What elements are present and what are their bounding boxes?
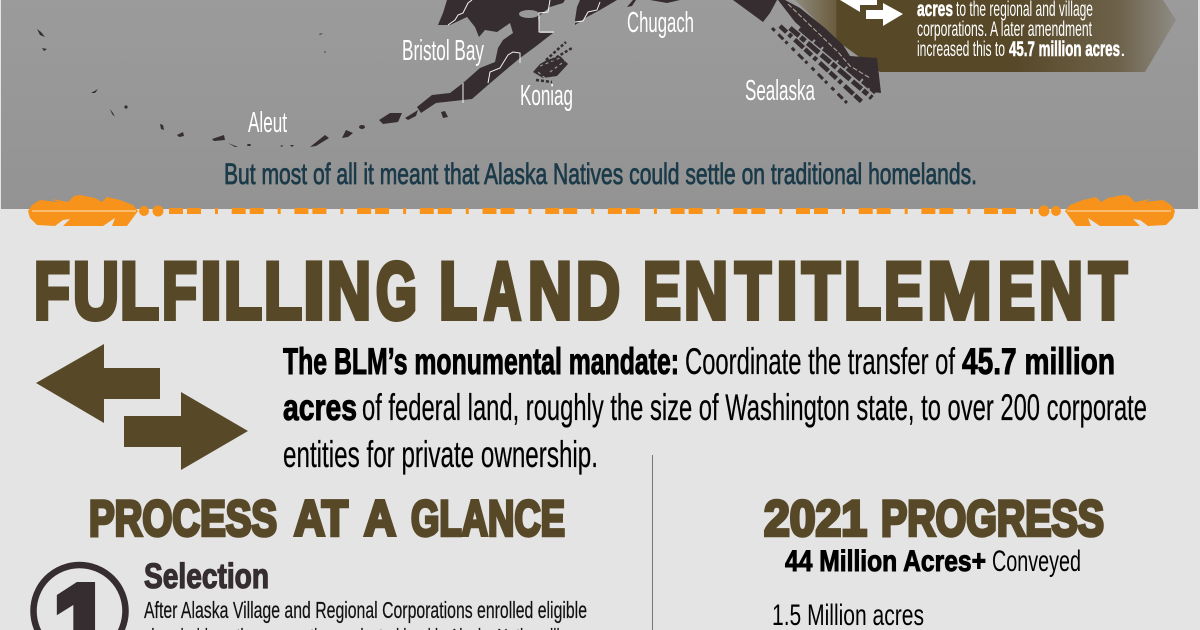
heading: 2021 progress: 2021 xyxy=(764,490,867,546)
title: L xyxy=(120,246,159,336)
icon: white transfer arrows xyxy=(840,0,903,26)
map: regional corporation boundaries xyxy=(448,0,600,103)
text block: BLM mandate: 45.7 million xyxy=(962,341,1115,382)
title: I xyxy=(200,246,222,336)
title: A xyxy=(484,246,521,336)
title: U xyxy=(73,246,119,336)
title: N xyxy=(327,246,371,336)
panel: Alaska map xyxy=(1,0,1198,209)
text block: BLM mandate: Coordinate the transfer of xyxy=(685,341,955,382)
icon: left feather xyxy=(28,195,138,226)
title: E xyxy=(884,246,923,336)
title: L xyxy=(224,246,262,336)
label: Aleut: Aleut xyxy=(248,107,287,139)
progress summary: 44 Million Acres+ xyxy=(785,545,986,578)
heading: 2021 progress xyxy=(764,490,1104,546)
title: L xyxy=(439,246,477,336)
title: L xyxy=(844,246,881,336)
title: M xyxy=(927,246,992,336)
heading: process at a glance xyxy=(89,490,565,546)
callout text: 45.7 million acres xyxy=(1009,38,1120,61)
label: Bristol Bay: Bristol Bay xyxy=(402,35,484,67)
title: I xyxy=(303,246,325,336)
title: D xyxy=(576,246,620,336)
callout text xyxy=(917,0,1126,61)
title: T xyxy=(802,246,840,336)
heading: process at a glance: PROCESS xyxy=(89,490,277,546)
title: N xyxy=(684,246,728,336)
map: lakes and islet channels xyxy=(519,4,870,78)
text block: BLM mandate: entities for private ownership. xyxy=(283,434,598,475)
heading: 2021 progress: PROGRESS xyxy=(881,490,1104,546)
step text: After Alaska Village and Regional Corporations enrolled eligible xyxy=(144,597,587,623)
label: Koniag: Koniag xyxy=(520,80,573,112)
step 1: selection xyxy=(34,557,587,630)
label: Chugach: Chugach xyxy=(627,7,694,39)
heading: process at a glance: AT xyxy=(294,490,348,546)
title: T xyxy=(1089,246,1127,336)
text block: BLM mandate: acres xyxy=(283,387,357,428)
title: F xyxy=(162,246,197,336)
icon: right feather xyxy=(1065,195,1175,226)
title: F xyxy=(34,246,70,336)
callout text: increased this to xyxy=(917,38,1005,61)
heading: process at a glance: GLANCE xyxy=(411,490,565,546)
step text xyxy=(144,597,587,630)
icon: transfer arrows xyxy=(36,344,248,470)
icon: number 1 badge xyxy=(34,565,126,630)
divider: feathers and beads xyxy=(28,195,1175,226)
callout text: . xyxy=(1120,38,1126,61)
title: N xyxy=(1039,246,1083,336)
title: T xyxy=(735,246,771,336)
text block: BLM mandate xyxy=(283,341,1147,475)
heading: process at a glance: A xyxy=(364,490,396,546)
label: Sealaska: Sealaska xyxy=(745,75,816,107)
step heading: Selection xyxy=(144,557,269,596)
map: Alaska landmass xyxy=(37,0,881,147)
map: Kodiak speckles xyxy=(536,42,572,82)
title: I xyxy=(776,246,798,336)
title: N xyxy=(528,246,572,336)
progress summary: Conveyed xyxy=(992,545,1081,578)
map: panhandle islands xyxy=(772,26,876,106)
title: E xyxy=(998,246,1035,336)
text block: BLM mandate: The BLM’s monumental mandate: xyxy=(283,341,679,382)
column divider xyxy=(652,455,654,630)
title: G xyxy=(376,246,417,336)
title: E xyxy=(643,246,681,336)
callout: land transfer xyxy=(795,0,1176,72)
title: L xyxy=(264,246,302,336)
